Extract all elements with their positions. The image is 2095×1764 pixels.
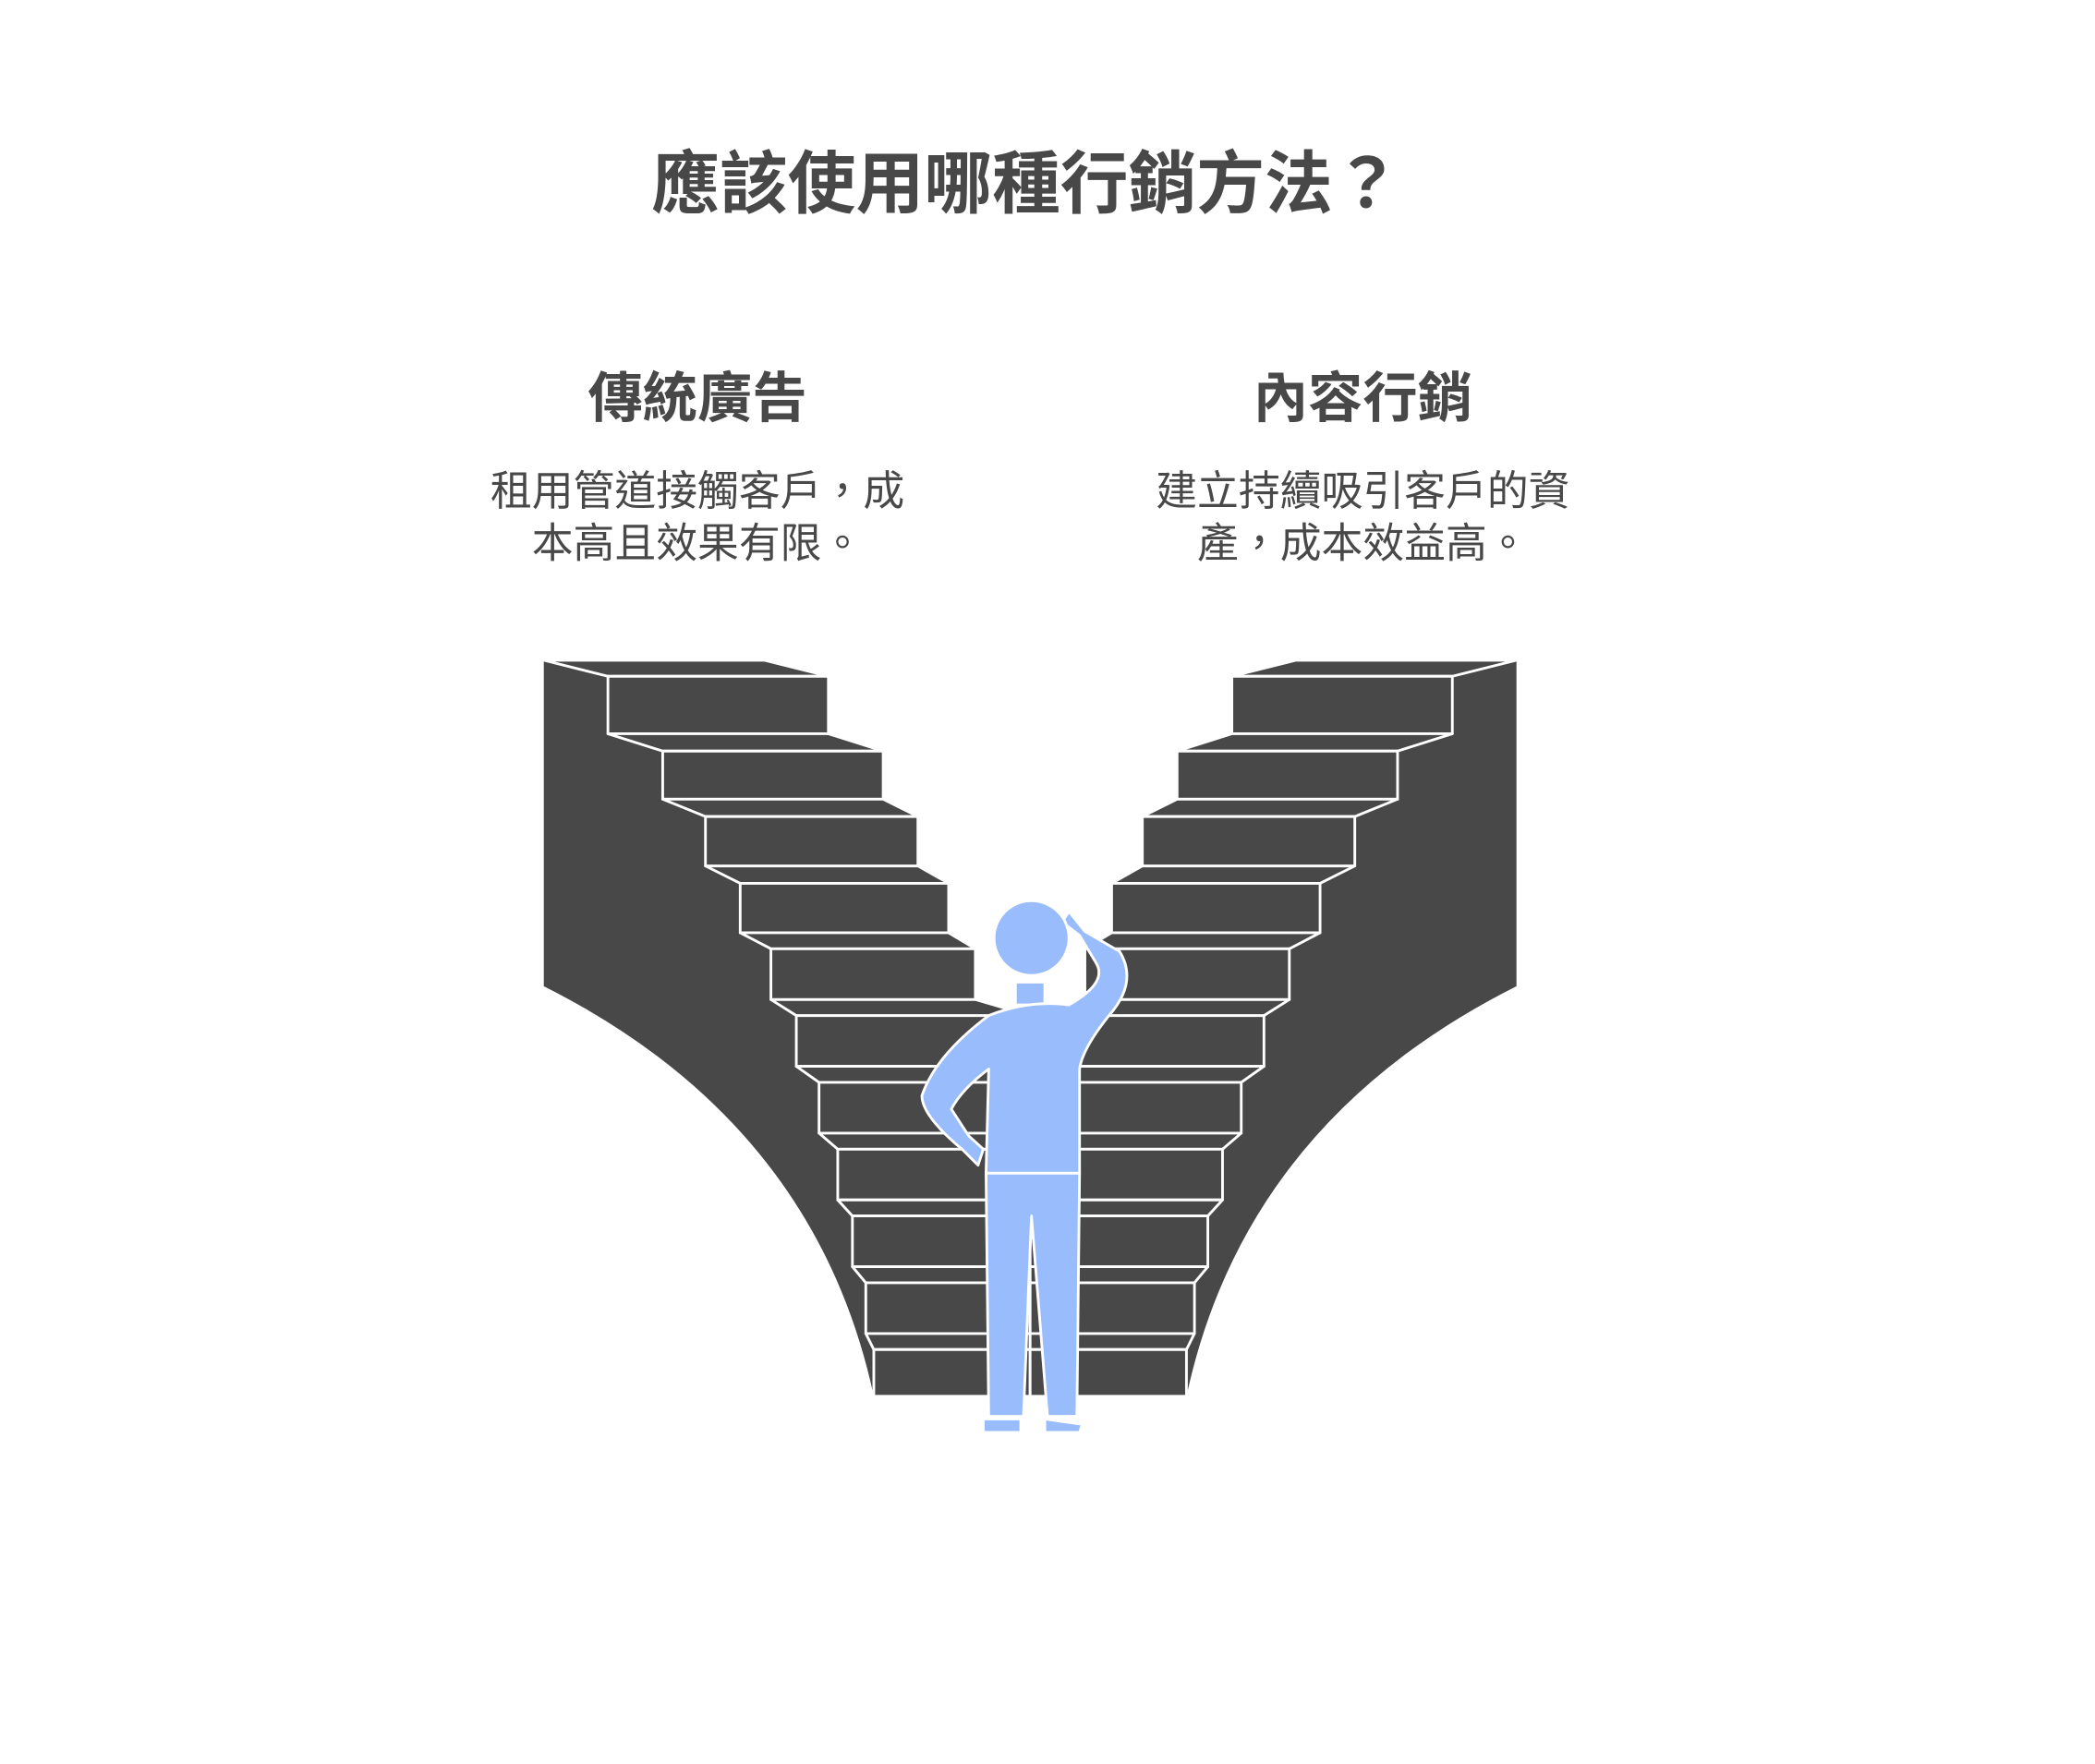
text block: content marketing description: 產，成本效益高。 bbox=[1197, 520, 1529, 567]
text block: traditional ads description: 租用管道接觸客戶，成 bbox=[490, 467, 904, 514]
text block: traditional ads description: 本高且效果有限。 bbox=[532, 520, 863, 567]
heading: content marketing: 內容行銷 bbox=[1253, 368, 1472, 429]
text block: content marketing description: 建立持續吸引客戶的資 bbox=[1156, 467, 1570, 514]
icon: confused person bbox=[922, 900, 1127, 1432]
title: 應該使用哪種行銷方法？ bbox=[651, 146, 1400, 223]
heading: traditional ads: 傳統廣告 bbox=[587, 368, 807, 429]
stairs: left staircase bbox=[544, 660, 1030, 1396]
stairs: right staircase bbox=[1030, 660, 1517, 1396]
